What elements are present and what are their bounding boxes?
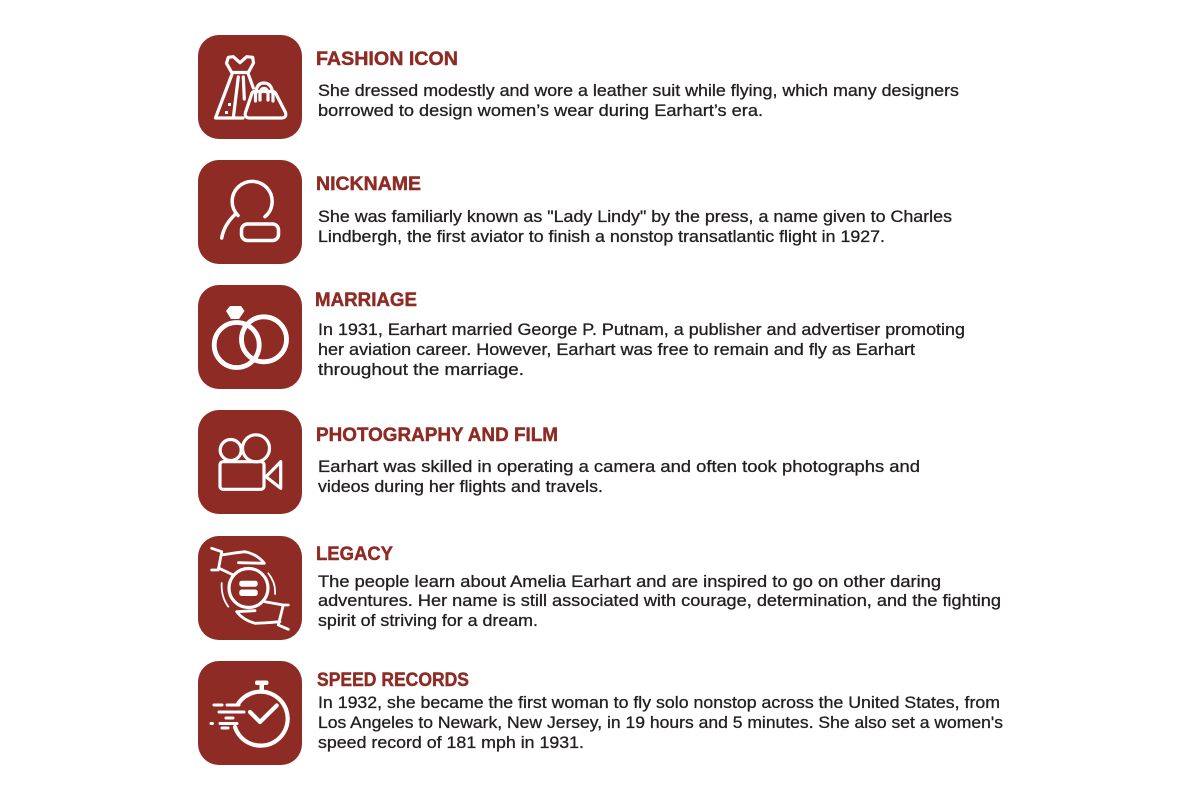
text: fashion icon description: borrowed to design women’s wear during Earhart’s era. bbox=[318, 102, 763, 120]
icon: interlocked rings bbox=[198, 285, 302, 389]
text: nickname description: She was familiarly known as "Lady Lindy" by the press, a name given to Charles bbox=[318, 208, 952, 226]
heading: marriage: MARRIAGE bbox=[315, 289, 417, 311]
panel: fashion icon bbox=[198, 35, 959, 139]
icon: hands around a coin bbox=[198, 536, 302, 640]
icon: stopwatch with speed lines bbox=[198, 661, 302, 765]
text: legacy description bbox=[318, 573, 1001, 630]
heading: nickname: NICKNAME bbox=[316, 173, 421, 195]
text: speed records description: Los Angeles to Newark, New Jersey, in 19 hours and 5 minutes. She also set a women's bbox=[318, 714, 1003, 732]
text: marriage description bbox=[318, 321, 965, 379]
text: speed records description: speed record of 181 mph in 1931. bbox=[318, 734, 584, 752]
text: photography and film description: videos during her flights and travels. bbox=[318, 478, 603, 496]
text: marriage description: throughout the marriage. bbox=[318, 361, 524, 379]
text: speed records description: In 1932, she became the first woman to fly solo nonstop across the United States, from bbox=[318, 694, 1000, 712]
icon: person with name tag bbox=[198, 160, 302, 264]
heading: fashion icon: FASHION ICON bbox=[316, 48, 458, 70]
text: fashion icon description: She dressed modestly and wore a leather suit while flying, which many designers bbox=[318, 82, 959, 100]
heading: speed records: SPEED RECORDS bbox=[317, 669, 469, 691]
text: marriage description: her aviation career. However, Earhart was free to remain and fly as Earhart bbox=[318, 341, 915, 359]
text: photography and film description: Earhart was skilled in operating a camera and often took photographs and bbox=[318, 458, 920, 476]
panel: marriage bbox=[198, 285, 965, 389]
heading: photography and film: PHOTOGRAPHY AND FILM bbox=[316, 424, 558, 446]
text: nickname description: Lindbergh, the first aviator to finish a nonstop transatlantic flight in 1927. bbox=[318, 228, 885, 246]
panel: photography and film bbox=[198, 410, 920, 514]
heading: legacy: LEGACY bbox=[316, 543, 393, 565]
text: photography and film description bbox=[318, 458, 920, 496]
text: legacy description: adventures. Her name is still associated with courage, determination, and the fighting bbox=[318, 592, 1001, 610]
text: fashion icon description bbox=[318, 82, 959, 120]
text: speed records description bbox=[318, 694, 1003, 752]
text: marriage description: In 1931, Earhart married George P. Putnam, a publisher and advertiser promoting bbox=[318, 321, 965, 339]
text: legacy description: The people learn about Amelia Earhart and are inspired to go on other daring bbox=[318, 573, 941, 591]
panel: legacy bbox=[198, 536, 1001, 640]
panel: speed records bbox=[198, 661, 1003, 765]
icon: dress and handbag bbox=[198, 35, 302, 139]
text: nickname description bbox=[318, 208, 952, 246]
text: legacy description: spirit of striving for a dream. bbox=[318, 612, 538, 630]
panel: nickname bbox=[198, 160, 952, 264]
icon: film camera bbox=[198, 410, 302, 514]
